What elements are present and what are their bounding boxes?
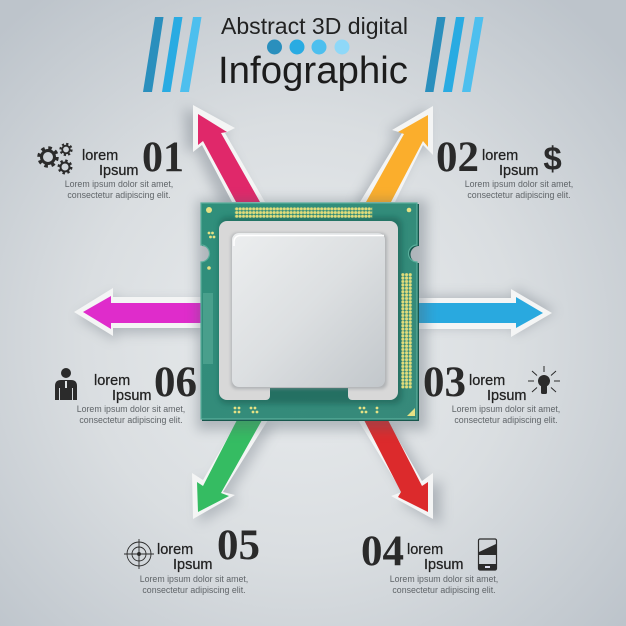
body text: Lorem ipsum dolor sit amet, (77, 404, 185, 414)
arrow 04 red (358, 420, 441, 525)
left stripes (143, 17, 202, 92)
arrow 02 orange (354, 106, 433, 207)
block 01 (39, 134, 184, 200)
body text: consectetur adipiscing elit. (67, 190, 171, 200)
heading: lorem (157, 542, 193, 558)
body text: consectetur adipiscing elit. (392, 585, 496, 595)
number 06: 06 (154, 359, 197, 406)
top pin contacts (235, 207, 372, 218)
arrow 06 magenta (74, 288, 204, 341)
heading: Ipsum (424, 557, 464, 573)
body text: consectetur adipiscing elit. (79, 415, 183, 425)
right stripes (425, 17, 484, 92)
contact dots (206, 207, 411, 413)
number 02: 02 (436, 134, 479, 181)
heading: Ipsum (499, 163, 538, 179)
number 01: 01 (142, 134, 184, 181)
number 03: 03 (423, 359, 466, 406)
heading: Ipsum (487, 388, 526, 404)
chip shadow (197, 200, 427, 430)
arrow 05 green (192, 420, 274, 524)
block 06 (55, 359, 197, 425)
chip board (202, 204, 419, 421)
arrow 03 blue (418, 287, 555, 337)
block 02 (436, 134, 573, 200)
icon: light bulb (528, 366, 560, 394)
heat spreader lid (232, 233, 385, 387)
arrow 01 pink (184, 105, 265, 207)
icon: dollar: $ (543, 140, 562, 177)
body text: consectetur adipiscing elit. (467, 190, 571, 200)
heading: lorem (94, 373, 130, 389)
icon: gears (39, 144, 72, 173)
heading: lorem (407, 542, 443, 558)
title line two: Infographic (218, 50, 408, 92)
heading: lorem (482, 148, 518, 164)
block 05 (124, 522, 260, 595)
body text: Lorem ipsum dolor sit amet, (140, 574, 248, 584)
processor chip (201, 203, 419, 421)
title (218, 13, 408, 92)
body text: Lorem ipsum dolor sit amet, (65, 179, 173, 189)
body text: Lorem ipsum dolor sit amet, (465, 179, 573, 189)
number 04: 04 (361, 528, 404, 575)
heading: Ipsum (99, 163, 138, 179)
number 05: 05 (217, 522, 260, 569)
block 03 (423, 359, 560, 425)
block 04 (361, 528, 498, 595)
corner triangle (407, 408, 415, 416)
icon: target (124, 539, 154, 569)
body text: Lorem ipsum dolor sit amet, (390, 574, 498, 584)
heading: Ipsum (173, 557, 212, 573)
body text: Lorem ipsum dolor sit amet, (452, 404, 560, 414)
heading: lorem (469, 373, 505, 389)
base shadow on board (219, 217, 402, 404)
heading: Ipsum (112, 388, 152, 404)
lid shadow (231, 233, 387, 389)
right pin contacts (401, 273, 412, 389)
title line one: Abstract 3D digital (221, 13, 408, 39)
heading: lorem (82, 148, 118, 164)
body text: consectetur adipiscing elit. (142, 585, 246, 595)
icon: businessman (55, 368, 77, 400)
body text: consectetur adipiscing elit. (454, 415, 558, 425)
icon: phone (478, 539, 496, 570)
heat spreader base (219, 221, 398, 400)
board label strip (203, 293, 213, 364)
title dots (267, 40, 350, 54)
